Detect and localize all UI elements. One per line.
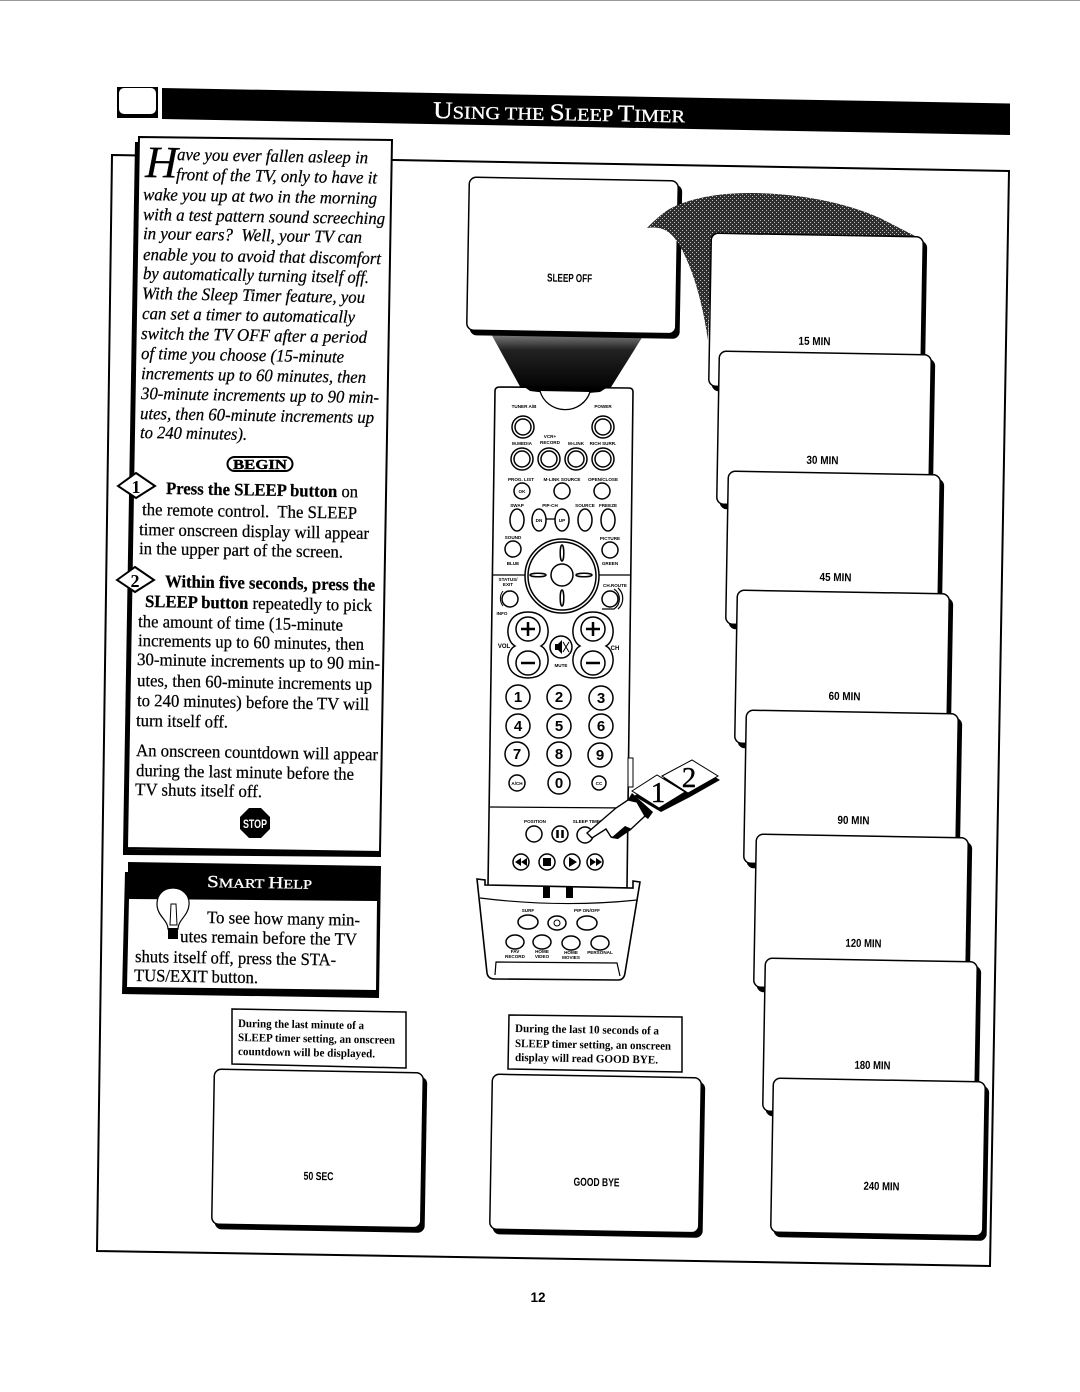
- number keypad: 6: [597, 718, 605, 735]
- TV screen: 15 MIN: [709, 233, 927, 395]
- power buttons: TUNER A/B: [512, 404, 537, 409]
- TV screen: SLEEP OFF: [467, 177, 682, 339]
- main page frame: [97, 155, 1009, 1266]
- menu buttons: OK: [519, 489, 526, 494]
- begin badge: BEGIN: [233, 458, 287, 473]
- number keypad: 5: [555, 718, 563, 735]
- icon: light bulb: [157, 888, 189, 939]
- caption: last minute: During the last minute of a: [238, 1018, 364, 1032]
- lower flap: RECORD: [505, 954, 526, 959]
- TV screen: 60 MIN: [735, 590, 953, 752]
- number keypad: 9: [596, 747, 604, 764]
- picture-in-picture buttons: SWAP: [510, 503, 524, 508]
- header: title bar: USING THE SLEEP TIMER: [433, 98, 685, 128]
- caption: last minute: countdown will be displayed.: [238, 1046, 375, 1060]
- number keypad: 8: [555, 746, 563, 763]
- caption: last 10 seconds: display will read GOOD BYE.: [515, 1052, 658, 1066]
- TV screen: 50 SEC: 50 SEC: [303, 1171, 334, 1183]
- countdown note: An onscreen countdown will appear: [136, 740, 378, 764]
- TV screen: GOOD BYE: GOOD BYE: [573, 1177, 620, 1189]
- TV screen: 30 MIN: [717, 351, 935, 513]
- introduction paragraph: of time you choose (15-minute: [141, 343, 344, 367]
- introduction paragraph: to 240 minutes).: [140, 422, 247, 444]
- caption: last minute: SLEEP timer setting, an onscreen: [238, 1032, 396, 1047]
- source buttons: RICH SURR.: [590, 441, 616, 446]
- caption: last 10 seconds: SLEEP timer setting, an onscreen: [515, 1038, 672, 1053]
- icon: stop sign: STOP: [243, 817, 267, 831]
- source buttons: M.MEDIA: [512, 441, 533, 446]
- introduction paragraph: wake you up at two in the morning: [143, 184, 377, 208]
- TV screen: 180 MIN: [763, 958, 981, 1120]
- introduction paragraph: [140, 137, 385, 444]
- light beam from remote: [490, 332, 643, 392]
- step 1: 1: [132, 477, 140, 497]
- navigation dial: [493, 539, 631, 613]
- TV screen: 30 MIN: 30 MIN: [806, 455, 839, 467]
- introduction paragraph: in your ears? Well, your TV can: [143, 223, 362, 247]
- playback section: POSITION: [524, 819, 547, 824]
- introduction paragraph: ave you ever fallen asleep in: [177, 144, 368, 167]
- lower flap: HOME: [564, 950, 578, 955]
- lower flap: SURF: [522, 908, 534, 913]
- picture-in-picture buttons: DN: [536, 518, 543, 523]
- status and channel-return buttons: INFO: [497, 611, 508, 616]
- TV screen: 60 MIN: 60 MIN: [828, 691, 861, 703]
- number keypad: CC: [596, 781, 603, 786]
- lower flap: VIDEO: [535, 954, 550, 959]
- picture-in-picture buttons: UP: [559, 518, 565, 523]
- picture-in-picture buttons: PIP-CH: [542, 503, 558, 508]
- introduction paragraph: switch the TV OFF after a period: [141, 323, 367, 347]
- introduction paragraph: with a test pattern sound screeching: [143, 204, 385, 228]
- smart help text: utes remain before the TV: [180, 926, 358, 949]
- picture-in-picture buttons: SOURCE: [575, 503, 595, 508]
- step 2: increments up to 60 minutes, then: [138, 630, 364, 654]
- status and channel-return buttons: EXIT: [503, 582, 513, 587]
- step 1: in the upper part of the screen.: [139, 538, 343, 562]
- step 2: SLEEP button repeatedly to pick: [145, 591, 372, 615]
- introduction paragraph: 30-minute increments up to 90 min-: [140, 383, 379, 407]
- panel: instructions: [117, 137, 392, 857]
- lower flap: FAV: [511, 949, 520, 954]
- step 2: the amount of time (15-minute: [138, 611, 343, 635]
- lower flap: PIP ON/OFF: [574, 908, 600, 913]
- header: title bar: [162, 88, 1010, 135]
- remote control: [477, 386, 640, 980]
- source buttons: RECORD: [540, 440, 561, 445]
- number keypad: 1: [514, 689, 522, 706]
- lower flap: HOME: [535, 949, 549, 954]
- countdown note: TV shuts itself off.: [135, 779, 262, 801]
- smart help text: TUS/EXIT button.: [134, 965, 258, 987]
- introduction paragraph: front of the TV, only to have it: [176, 164, 378, 188]
- TV screen: 240 MIN: 240 MIN: [863, 1181, 900, 1193]
- panel: smart help: [122, 862, 381, 998]
- TV screen: 180 MIN: 180 MIN: [854, 1060, 891, 1072]
- menu buttons: OPEN/CLOSE: [588, 477, 618, 482]
- caption: last minute: [232, 1009, 406, 1068]
- introduction paragraph: by automatically turning itself off.: [143, 263, 369, 287]
- lower flap: PERSONAL: [587, 950, 613, 955]
- source buttons: [511, 434, 616, 470]
- volume and channel rockers: VOL: [498, 644, 510, 650]
- number keypad: 2: [555, 689, 563, 706]
- volume and channel rockers: MUTE: [554, 663, 568, 668]
- number keypad: A/CH: [511, 781, 523, 786]
- sound and picture buttons: GREEN: [602, 561, 619, 566]
- step 2: Within five seconds, press the: [165, 571, 375, 595]
- status and channel-return buttons: CH.ROUTE: [603, 583, 627, 588]
- TV screen: SLEEP OFF: SLEEP OFF: [547, 273, 592, 285]
- step 2: to 240 minutes) before the TV will: [137, 690, 369, 714]
- menu buttons: PROG. LIST: [508, 477, 534, 482]
- smart help text: To see how many min-: [207, 907, 360, 930]
- header: TV icon: [117, 87, 158, 118]
- sound and picture buttons: PICTURE: [600, 536, 620, 541]
- step 1: the remote control. The SLEEP: [142, 499, 357, 523]
- light beam to stacked screens: [647, 193, 917, 340]
- step 2: 30-minute increments up to 90 min-: [137, 649, 380, 673]
- countdown note: [135, 740, 378, 801]
- caption: last 10 seconds: During the last 10 seconds of a: [515, 1023, 659, 1038]
- smart help heading: SMART HELP: [207, 872, 312, 893]
- TV screen: GOOD BYE: [490, 1074, 705, 1238]
- step 2: turn itself off.: [136, 710, 228, 732]
- number keypad: 4: [514, 718, 523, 735]
- playback section: [490, 807, 630, 870]
- step 1: timer onscreen display will appear: [139, 519, 369, 543]
- status and channel-return buttons: [497, 577, 627, 616]
- sound and picture buttons: BLUE: [507, 561, 519, 566]
- arrow tag: steps 1 and 2: [632, 760, 720, 812]
- number keypad: 0: [555, 775, 563, 792]
- arrow tag: steps 1 and 2: 1: [651, 777, 665, 809]
- page number: 12: [530, 1290, 546, 1305]
- lower flap: [477, 879, 640, 980]
- number keypad: 7: [513, 746, 521, 763]
- step 2: 2: [130, 571, 140, 591]
- countdown note: during the last minute before the: [136, 760, 354, 784]
- sound and picture buttons: [505, 535, 620, 566]
- icon: stop sign: [240, 808, 270, 838]
- introduction paragraph: H: [144, 137, 181, 188]
- volume and channel rockers: CH: [611, 646, 619, 652]
- step 1: Press the SLEEP button on: [166, 478, 358, 501]
- remote body: [488, 387, 633, 888]
- number keypad: [505, 685, 613, 794]
- status and channel-return buttons: STATUS/: [499, 577, 518, 582]
- power buttons: POWER: [594, 404, 612, 409]
- step 2: [117, 567, 380, 732]
- TV screen: 120 MIN: [754, 834, 972, 996]
- menu buttons: [508, 477, 618, 499]
- number keypad: 3: [597, 690, 605, 707]
- side tab: [628, 758, 633, 787]
- menu buttons: M-LINK SOURCE: [543, 477, 581, 482]
- TV screen: 120 MIN: 120 MIN: [845, 938, 882, 950]
- sound and picture buttons: SOUND: [505, 535, 522, 540]
- smart help text: [134, 907, 360, 987]
- power buttons: [512, 404, 614, 438]
- introduction paragraph: increments up to 60 minutes, then: [141, 363, 366, 387]
- arrow tag: steps 1 and 2: 2: [682, 762, 696, 794]
- icon: pointing hand: [587, 793, 653, 839]
- TV screen: 45 MIN: [726, 471, 944, 633]
- TV screen: 240 MIN: [771, 1078, 989, 1241]
- TV screen: 15 MIN: 15 MIN: [798, 336, 831, 348]
- smart help text: shuts itself off, press the STA-: [135, 946, 336, 970]
- TV screen: 50 SEC: [212, 1069, 427, 1233]
- step 2: utes, then 60-minute increments up: [137, 670, 372, 694]
- introduction paragraph: can set a timer to automatically: [142, 303, 355, 327]
- introduction paragraph: With the Sleep Timer feature, you: [142, 283, 365, 307]
- source buttons: M-LINK: [568, 441, 585, 446]
- lower flap: MOVIES: [562, 955, 580, 960]
- introduction paragraph: utes, then 60-minute increments up: [140, 403, 374, 427]
- introduction paragraph: enable you to avoid that discomfort: [143, 244, 382, 268]
- volume and channel rockers: [498, 612, 619, 678]
- picture-in-picture buttons: FREEZE: [599, 503, 617, 508]
- TV screen: 90 MIN: [744, 710, 962, 872]
- playback section: SLEEP TIMER: [573, 819, 604, 824]
- TV screen: 45 MIN: 45 MIN: [819, 572, 852, 584]
- begin badge: [228, 457, 292, 473]
- picture-in-picture buttons: [510, 503, 617, 531]
- source buttons: VCR+: [544, 434, 557, 439]
- TV screen: 90 MIN: 90 MIN: [837, 815, 870, 827]
- step 1: [118, 473, 369, 562]
- caption: last 10 seconds: [508, 1015, 682, 1072]
